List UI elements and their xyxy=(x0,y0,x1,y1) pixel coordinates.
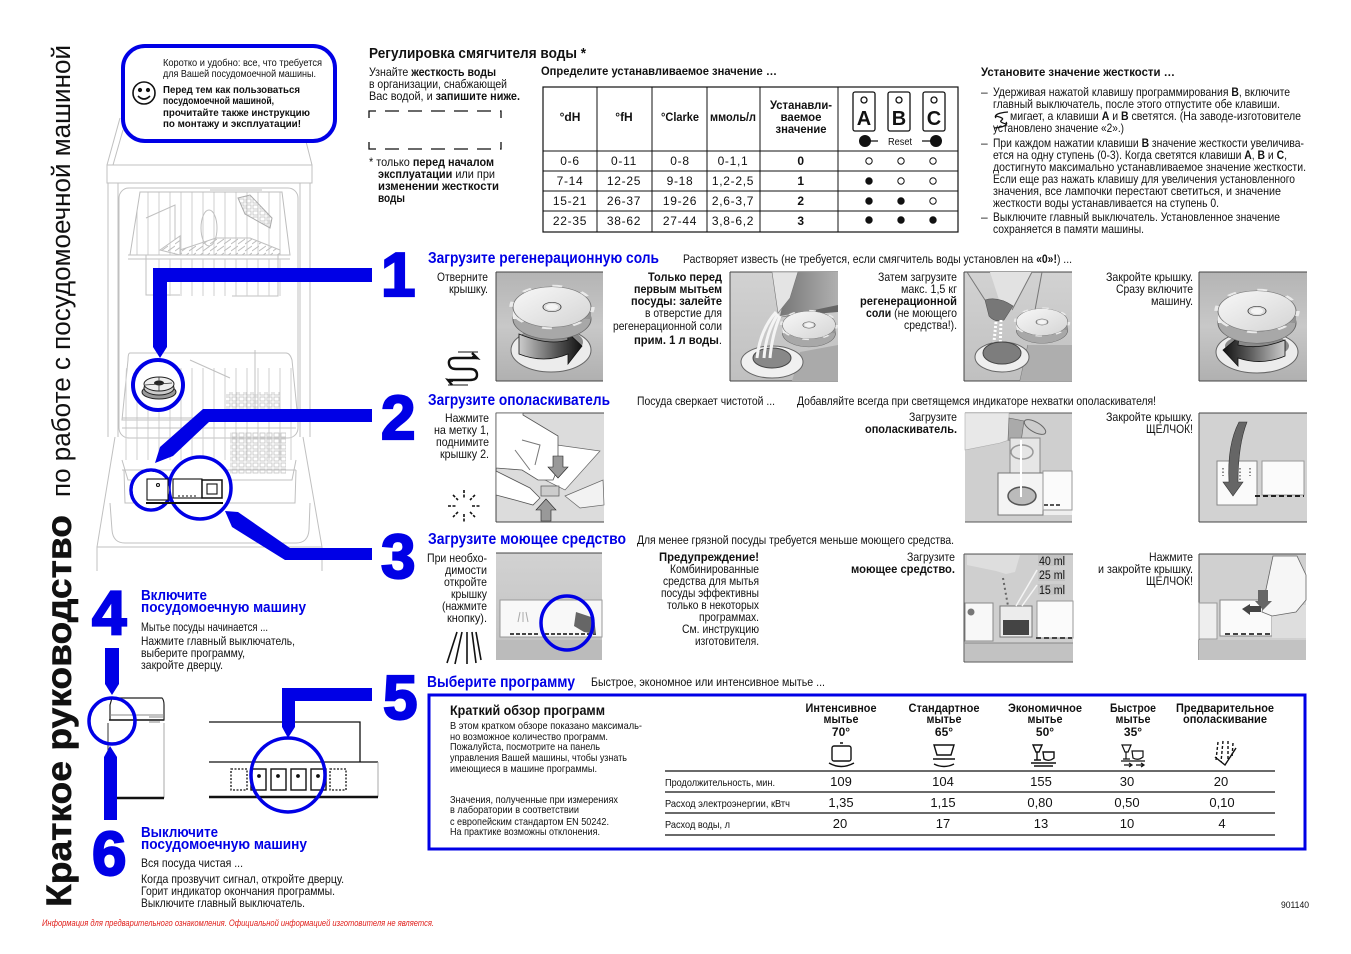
section 4: switch on: выберите программу, xyxy=(141,646,245,660)
icon: small salt symbol xyxy=(994,112,1008,128)
program table rows: Расход электроэнергии, кВтч xyxy=(665,798,790,810)
panel: hardness table: ваемое xyxy=(780,110,822,124)
image: close detergent flap xyxy=(1199,554,1306,660)
section 1: regeneration salt: посуды: залейте xyxy=(631,294,722,308)
program buttons xyxy=(231,769,346,790)
callout: short and handy: по монтажу и эксплуатации! xyxy=(163,118,301,130)
callout: short and handy: Коротко и удобно: все, что требуется xyxy=(163,57,322,69)
program table rows: 13 xyxy=(1034,816,1048,831)
section 1: regeneration salt: Сразу включите xyxy=(1116,282,1193,296)
program headers xyxy=(806,701,1274,739)
panel: hardness table: °fH xyxy=(615,110,633,124)
panel: hardness table: 3,8-6,2 xyxy=(712,214,754,228)
section 5: select program heading: Быстрое, экономное или интенсивное мытье ... xyxy=(591,675,825,689)
panel: water softener intro: воды xyxy=(378,191,405,205)
section 6: switch off: Выключите xyxy=(141,825,218,841)
icon: A B C keys with reset: A xyxy=(857,108,871,130)
panel: hardness table: 0-11 xyxy=(611,154,637,168)
section 4: switch on: посудомоечную машину xyxy=(141,600,306,616)
program table rows: 0,80 xyxy=(1027,795,1053,810)
section 3: detergent: Загрузите моющее средство xyxy=(428,531,626,548)
panel: water softener intro: Регулировка смягчителя воды * xyxy=(369,46,586,62)
section 1: regeneration salt xyxy=(428,250,1307,385)
step number 2: 2 xyxy=(381,384,415,453)
panel: hardness table: 12-25 xyxy=(607,174,641,188)
section 5: select program heading: Выберите программу xyxy=(427,674,575,691)
panel: water softener intro: эксплуатации или при xyxy=(378,167,495,181)
panel: set hardness instructions: достигнуто максимально устанавливаемое значение жесткости. xyxy=(993,160,1306,174)
section 6: switch off: Когда прозвучит сигнал, откройте дверцу. xyxy=(141,872,344,886)
image: open cap xyxy=(496,272,603,381)
program table rows: Продолжительность, мин. xyxy=(665,777,775,789)
program table rows: 109 xyxy=(830,774,852,789)
panel: program overview: управления Вашей машины, чтобы узнать xyxy=(450,752,627,764)
section 3: detergent xyxy=(427,531,1306,664)
program table rows: 10 xyxy=(1120,816,1134,831)
icon: smiley xyxy=(133,82,155,104)
section 3: detergent: Комбинированные xyxy=(670,562,759,576)
panel: hardness table: 22-35 xyxy=(553,214,587,228)
program table rows: 4 xyxy=(1218,816,1226,831)
section 1: regeneration salt: первым мытьем xyxy=(634,282,722,296)
panel: hardness table: 26-37 xyxy=(607,194,641,208)
image: pour salt xyxy=(964,272,1072,381)
section 1: regeneration salt: машину. xyxy=(1151,294,1193,308)
callout: short and handy: прочитайте также инструкцию xyxy=(163,107,310,119)
measure labels: 25 ml xyxy=(1039,570,1065,582)
program headers: 65° xyxy=(935,725,953,739)
section 3: detergent: только в некоторых xyxy=(667,598,759,612)
panel: set hardness instructions: Установите значение жесткости … xyxy=(981,65,1175,79)
panel: hardness table: ммоль/л xyxy=(710,110,756,124)
program headers: мытье xyxy=(824,712,859,726)
program headers: Предварительное xyxy=(1176,701,1274,715)
section 6: switch off: Горит индикатор окончания программы. xyxy=(141,884,335,898)
program table rows: 20 xyxy=(1214,774,1228,789)
panel: set hardness instructions: установлено значение «2».) xyxy=(993,121,1124,135)
panel: program overview: но возможное количество программ. xyxy=(450,731,608,743)
panel: hardness table: 27-44 xyxy=(663,214,697,228)
section 4: switch on xyxy=(141,588,306,672)
program icons xyxy=(829,741,1236,767)
panel: set hardness instructions: – xyxy=(981,210,988,224)
panel: set hardness instructions: – xyxy=(981,85,988,99)
section 4: switch on: Мытье посуды начинается ... xyxy=(141,620,268,634)
panel: water softener intro xyxy=(369,46,586,205)
program table rows: 104 xyxy=(932,774,954,789)
illustration: machine front xyxy=(89,648,164,820)
arrow 3 xyxy=(225,511,372,560)
section 1: regeneration salt: Растворяет известь (не требуется, если смягчитель воды установлен на «0»!) ... xyxy=(683,252,1072,266)
arrow 5 and circle xyxy=(251,688,372,812)
image: press marker xyxy=(496,413,604,522)
program table rows: 1,35 xyxy=(828,795,854,810)
section 1: regeneration salt: прим. 1 л воды. xyxy=(634,333,722,347)
section 3: detergent: моющее средство. xyxy=(851,562,955,576)
program headers: мытье xyxy=(926,712,962,726)
section 1: regeneration salt: в отверстие для xyxy=(645,306,722,320)
section 2: rinse aid: на метку 1, xyxy=(434,423,489,437)
icon: pot xyxy=(829,743,854,766)
section 3: detergent: См. инструкцию xyxy=(682,622,759,636)
footer disclaimer: Информация для предварительного ознакомления. Официальной информацией изготовителя не является. xyxy=(42,918,434,929)
panel: water softener intro: Вас водой, и запишите ниже. xyxy=(369,89,520,103)
panel: water softener intro: * только перед началом xyxy=(369,155,494,169)
panel: hardness table: 2,6-3,7 xyxy=(712,194,754,208)
illustration: control panel xyxy=(209,688,378,812)
section 1: regeneration salt: Загрузите регенерационную соль xyxy=(428,250,659,267)
panel: hardness table: 7-14 xyxy=(557,174,583,188)
section 6: switch off: Выключите главный выключатель. xyxy=(141,896,305,910)
icon: quick glass and cup xyxy=(1121,745,1145,767)
section 3: detergent: димости xyxy=(445,563,487,577)
measure labels xyxy=(1038,555,1065,597)
program table rows: 30 xyxy=(1120,774,1134,789)
section 2: rinse aid: ЩЕЛЧОК! xyxy=(1146,422,1193,436)
icon: plates xyxy=(933,745,955,766)
section 1: regeneration salt: Затем загрузите xyxy=(878,270,957,284)
icon: blinking indicator xyxy=(448,490,480,522)
icon: softener cap xyxy=(142,377,176,399)
section 3: detergent: и закройте крышку. xyxy=(1098,562,1193,576)
panel: set hardness instructions: При каждом нажатии клавиши B значение жесткости увеличива- xyxy=(993,136,1304,150)
section 3: detergent: Нажмите xyxy=(1149,550,1193,564)
icon: A B C keys with reset: B xyxy=(892,108,906,130)
callout: short and handy: для Вашей посудомоечной машины. xyxy=(163,68,316,80)
panel: set hardness instructions: сохраняется в памяти машины. xyxy=(993,222,1144,236)
panel: program overview: имеющиеся в машине программы. xyxy=(450,763,597,775)
panel: hardness table xyxy=(541,64,958,232)
panel: hardness table: Определите устанавливаемое значение … xyxy=(541,64,777,78)
icon: A B C keys with reset: C xyxy=(927,108,941,130)
section 1: regeneration salt: регенерационной xyxy=(860,294,957,308)
section 4: switch on: Включите xyxy=(141,588,207,604)
section 3: detergent: посуды эффективны xyxy=(661,586,759,600)
section 3: detergent: кнопку). xyxy=(447,611,487,625)
section 2: rinse aid: крышку 2. xyxy=(440,447,489,461)
section 3: detergent: средства для мытья xyxy=(663,574,759,588)
panel: water softener intro: Узнайте жесткость воды xyxy=(369,65,496,79)
panel: hardness table: °Clarke xyxy=(661,110,699,124)
section 2: rinse aid: Загрузите ополаскиватель xyxy=(428,392,610,409)
program headers: 70° xyxy=(832,725,850,739)
panel: hardness table: 38-62 xyxy=(607,214,641,228)
section 5: select program heading xyxy=(427,674,825,691)
program headers: Стандартное xyxy=(908,701,980,715)
panel: set hardness instructions: мигает, а клавиши A и B светятся. (На заводе-изготовителе xyxy=(1010,109,1301,123)
panel: hardness table: 19-26 xyxy=(663,194,697,208)
section 1: regeneration salt: соли (не моющего xyxy=(866,306,957,320)
icon: A B C keys with reset: Reset xyxy=(888,137,912,148)
section 3: detergent: (нажмите xyxy=(442,599,487,613)
program headers: Экономичное xyxy=(1008,701,1082,715)
program headers: ополаскивание xyxy=(1183,712,1267,726)
panel: hardness table: 0-8 xyxy=(670,154,690,168)
panel: water softener intro: в организации, снабжающей xyxy=(369,77,507,91)
panel: hardness table: Устанавли- xyxy=(770,98,832,112)
section 1: regeneration salt: Закройте крышку. xyxy=(1106,270,1193,284)
callout: short and handy xyxy=(123,46,335,141)
step number 4: 4 xyxy=(92,579,127,648)
section 1: regeneration salt: Отверните xyxy=(437,270,488,284)
panel: hardness table: 2 xyxy=(797,194,805,208)
program headers: мытье xyxy=(1116,712,1151,726)
section 2: rinse aid: Нажмите xyxy=(445,411,489,425)
panel: program overview xyxy=(429,695,1305,849)
step number 3: 3 xyxy=(381,523,415,592)
illustration: open dishwasher line art xyxy=(97,118,322,571)
panel: program overview: Краткий обзор программ xyxy=(450,702,605,718)
program table rows xyxy=(665,774,1235,831)
section 3: detergent: крышку xyxy=(451,587,487,601)
section 3: detergent: Предупреждение! xyxy=(659,550,759,564)
panel: hardness table: 3 xyxy=(797,214,805,228)
document code: 901140 xyxy=(1281,900,1309,910)
program headers: Быстрое xyxy=(1110,701,1156,715)
panel: set hardness instructions: Выключите главный выключатель. Установленное значение xyxy=(993,210,1280,224)
icon: salt S symbol xyxy=(448,352,478,385)
program table rows: 155 xyxy=(1030,774,1052,789)
arrow 1 and softener cap circle xyxy=(133,268,372,410)
arrow 6 xyxy=(104,746,117,820)
section 2: rinse aid: Добавляйте всегда при светящемся индикаторе нехватки ополаскивателя! xyxy=(797,394,1156,408)
image: pour water xyxy=(730,272,838,381)
callout: blue ellipse xyxy=(541,596,593,650)
section 3: detergent: программах. xyxy=(699,610,759,624)
section 3: detergent: Для менее грязной посуды требуется меньше моющего средства. xyxy=(637,533,954,547)
section 2: rinse aid: Закройте крышку. xyxy=(1106,410,1193,424)
program table rows: 17 xyxy=(936,816,950,831)
section 6: switch off xyxy=(141,825,344,910)
section 1: regeneration salt: регенерационной соли xyxy=(613,319,722,333)
panel: hardness table: значение xyxy=(776,122,827,136)
image: close flap xyxy=(1199,413,1307,522)
program headers: 35° xyxy=(1124,725,1142,739)
program headers: мытье xyxy=(1028,712,1063,726)
panel: hardness table: 0-1,1 xyxy=(718,154,748,168)
section 1: regeneration salt: макс. 1,5 кг xyxy=(901,282,958,296)
callout: short and handy: Перед тем как пользоваться xyxy=(163,84,300,96)
panel: set hardness instructions: – xyxy=(981,136,988,150)
panel: water softener intro: изменении жесткости xyxy=(378,179,499,193)
panel: hardness table: 1 xyxy=(797,174,805,188)
section 4: switch on: Нажмите главный выключатель, xyxy=(141,634,295,648)
section 3: detergent: ЩЕЛЧОК! xyxy=(1146,574,1193,588)
icon: pre-rinse xyxy=(1215,741,1236,765)
panel: program overview: в лаборатории в соответствии xyxy=(450,804,579,816)
icon: dispenser xyxy=(146,479,223,503)
image: open detergent compartment xyxy=(496,553,602,660)
section 2: rinse aid xyxy=(428,392,1307,522)
program table rows: 1,15 xyxy=(930,795,956,810)
section 1: regeneration salt: крышку. xyxy=(449,282,488,296)
upper basket xyxy=(128,190,290,296)
section 1: regeneration salt: Только перед xyxy=(648,270,722,284)
section 4: switch on: закройте дверцу. xyxy=(141,658,223,672)
panel: set hardness instructions: жесткости воды устанавливается на ступень 0. xyxy=(993,196,1219,210)
panel: hardness table: 9-18 xyxy=(667,174,693,188)
section 2: rinse aid: Посуда сверкает чистотой ... xyxy=(637,394,775,408)
program table rows: Расход воды, л xyxy=(665,819,730,831)
arrow 2 and dispenser circles xyxy=(131,409,372,519)
image: fill detergent xyxy=(964,554,1073,662)
panel: set hardness instructions: Если еще раз нажать клавишу для увеличения установленного xyxy=(993,172,1295,186)
section 3: detergent: откройте xyxy=(444,575,487,589)
panel: program overview: Пожалуйста, посмотрите на панель xyxy=(450,741,600,753)
image: close cap xyxy=(1199,272,1307,381)
panel: hardness table: °dH xyxy=(560,110,580,124)
icon: A B C keys with reset xyxy=(853,92,945,148)
panel: set hardness instructions: ется на одну ступень (0-3). Когда светятся клавиши A, B и C, xyxy=(993,148,1287,162)
panel: hardness table: 15-21 xyxy=(553,194,587,208)
measure labels: 15 ml xyxy=(1039,585,1065,597)
program table rows: 0,50 xyxy=(1114,795,1140,810)
arrow 4 xyxy=(105,648,119,695)
program headers: Интенсивное xyxy=(806,701,877,715)
section 6: switch off: посудомоечную машину xyxy=(141,837,307,853)
icon: spray lines xyxy=(447,632,481,664)
section 3: detergent: При необхо- xyxy=(427,551,487,565)
image: pour rinse aid xyxy=(965,413,1072,522)
section 3: detergent: Загрузите xyxy=(907,550,955,564)
panel: set hardness instructions: главный выключатель, после этого отпустите обе клавиши. xyxy=(993,97,1280,111)
panel: set hardness instructions xyxy=(981,65,1306,236)
panel: hardness table: 1,2-2,5 xyxy=(712,174,754,188)
panel: program overview: В этом кратком обзоре показано максималь- xyxy=(450,720,642,732)
title: vertical heading: Краткое руководство xyxy=(40,515,79,907)
section 1: regeneration salt: средства!). xyxy=(904,318,957,332)
step number 5: 5 xyxy=(383,664,417,733)
section 2: rinse aid: поднимите xyxy=(436,435,489,449)
program headers: 50° xyxy=(1036,725,1054,739)
section 3: detergent: изготовителя. xyxy=(695,634,759,648)
callout: short and handy: посудомоечной машиной, xyxy=(163,95,274,107)
indicator lamps xyxy=(866,158,936,223)
title: vertical heading xyxy=(40,45,79,907)
note box: dashed frame xyxy=(369,111,501,149)
program table rows: 20 xyxy=(833,816,847,831)
panel: program overview: Значения, полученные при измерениях xyxy=(450,794,619,806)
panel: set hardness instructions: значения, все лампочки перестают светиться, и значение xyxy=(993,184,1281,198)
step number 1: 1 xyxy=(381,241,415,310)
panel: program overview: На практике возможны отклонения. xyxy=(450,826,600,838)
open door xyxy=(97,437,322,571)
section 2: rinse aid: ополаскиватель. xyxy=(865,422,957,436)
step number 6: 6 xyxy=(92,820,126,889)
panel: hardness table: 0 xyxy=(797,154,805,168)
measure labels: 40 ml xyxy=(1039,556,1065,568)
panel: hardness table: 0-6 xyxy=(560,154,580,168)
title: vertical heading: по работе с посудомоечной машиной xyxy=(48,45,76,497)
program table rows: 0,10 xyxy=(1209,795,1235,810)
section 6: switch off: Вся посуда чистая ... xyxy=(141,856,243,870)
panel: program overview: с европейским стандартом EN 50242. xyxy=(450,816,609,828)
icon: glass and cup xyxy=(1031,745,1056,766)
lower basket xyxy=(122,350,298,480)
panel: set hardness instructions: Удерживая нажатой клавишу программирования B, включите xyxy=(993,85,1290,99)
section 2: rinse aid: Загрузите xyxy=(909,410,957,424)
